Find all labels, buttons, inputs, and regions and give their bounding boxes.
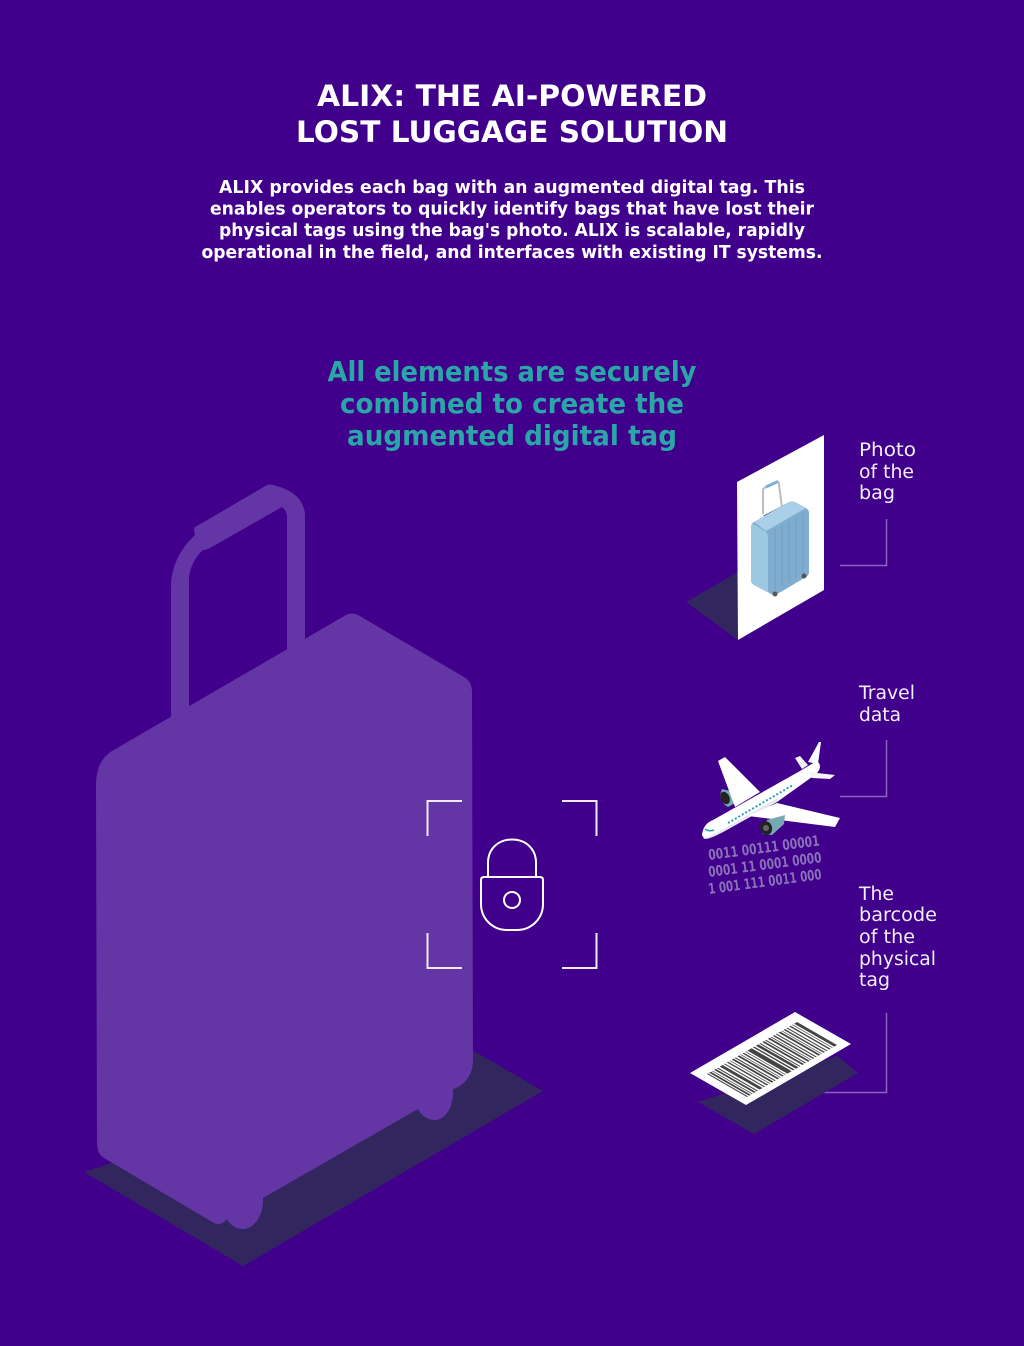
bracket line bbox=[840, 740, 886, 796]
binary data bbox=[707, 833, 823, 898]
large luggage illustration bbox=[84, 484, 543, 1266]
icon: padlock bbox=[481, 840, 543, 930]
intro text: physical tags using the bag's photo. ALIX is scalable, rapidly bbox=[219, 220, 805, 241]
subheading bbox=[328, 355, 696, 452]
binary data: 0001 11 0001 0000 bbox=[707, 850, 823, 881]
title: ALIX: THE AI-POWERED bbox=[317, 79, 707, 113]
label: barcode bbox=[858, 884, 937, 991]
luggage shadow bbox=[84, 1050, 543, 1266]
photo card bbox=[737, 435, 824, 640]
photo shadow bbox=[686, 572, 738, 640]
item: photo of the bag bbox=[686, 435, 916, 640]
back fin stub bbox=[795, 756, 808, 769]
binary data: 1 001 111 0011 000 bbox=[707, 867, 823, 898]
title bbox=[296, 79, 728, 149]
lock in scan frame bbox=[428, 801, 596, 968]
intro text: ALIX provides each bag with an augmented digital tag. This bbox=[219, 177, 805, 198]
barcode bars bbox=[707, 1022, 837, 1097]
label: photo of the bag: of the bbox=[859, 462, 914, 483]
far engine bbox=[720, 789, 735, 807]
barcode shadow bbox=[698, 1056, 858, 1134]
label: photo of the bag: bag bbox=[859, 483, 895, 504]
fuselage bbox=[702, 762, 820, 838]
bracket line bbox=[840, 519, 886, 566]
title: LOST LUGGAGE SOLUTION bbox=[296, 115, 728, 149]
label: travel data bbox=[858, 683, 915, 726]
intro text bbox=[202, 177, 822, 263]
subheading: combined to create the bbox=[340, 387, 684, 420]
item: barcode bbox=[690, 884, 937, 1134]
label: barcode: The bbox=[858, 884, 894, 905]
binary data: 0011 00111 00001 bbox=[707, 833, 821, 864]
label: barcode: barcode bbox=[859, 905, 937, 926]
label: barcode: of the bbox=[859, 927, 915, 948]
label: travel data: data bbox=[859, 705, 901, 726]
icon: small suitcase handle bbox=[763, 482, 785, 517]
label: photo of the bag bbox=[859, 440, 916, 504]
bracket line bbox=[820, 1013, 886, 1092]
luggage handle bbox=[171, 484, 305, 722]
label: photo of the bag: Photo bbox=[859, 440, 916, 461]
icon: airplane bbox=[702, 742, 840, 839]
label: travel data: Travel bbox=[858, 683, 915, 704]
subheading: augmented digital tag bbox=[347, 419, 677, 452]
item: travel data bbox=[702, 683, 915, 898]
near engine bbox=[762, 815, 785, 835]
subheading: All elements are securely bbox=[328, 355, 696, 388]
window row bbox=[728, 785, 793, 823]
intro text: operational in the field, and interfaces with existing IT systems. bbox=[202, 242, 822, 263]
icon: small suitcase body bbox=[751, 502, 809, 596]
label: barcode: tag bbox=[859, 970, 890, 991]
cockpit bbox=[705, 829, 714, 831]
far wing bbox=[718, 757, 760, 807]
tail plane bbox=[808, 772, 835, 779]
label: barcode: physical bbox=[859, 949, 936, 970]
intro text: enables operators to quickly identify bags that have lost their bbox=[210, 198, 814, 220]
scan frame corners bbox=[428, 801, 596, 968]
tail fin bbox=[808, 742, 821, 764]
luggage body bbox=[96, 614, 473, 1229]
barcode tag bbox=[690, 1012, 851, 1105]
near wing bbox=[748, 803, 840, 827]
